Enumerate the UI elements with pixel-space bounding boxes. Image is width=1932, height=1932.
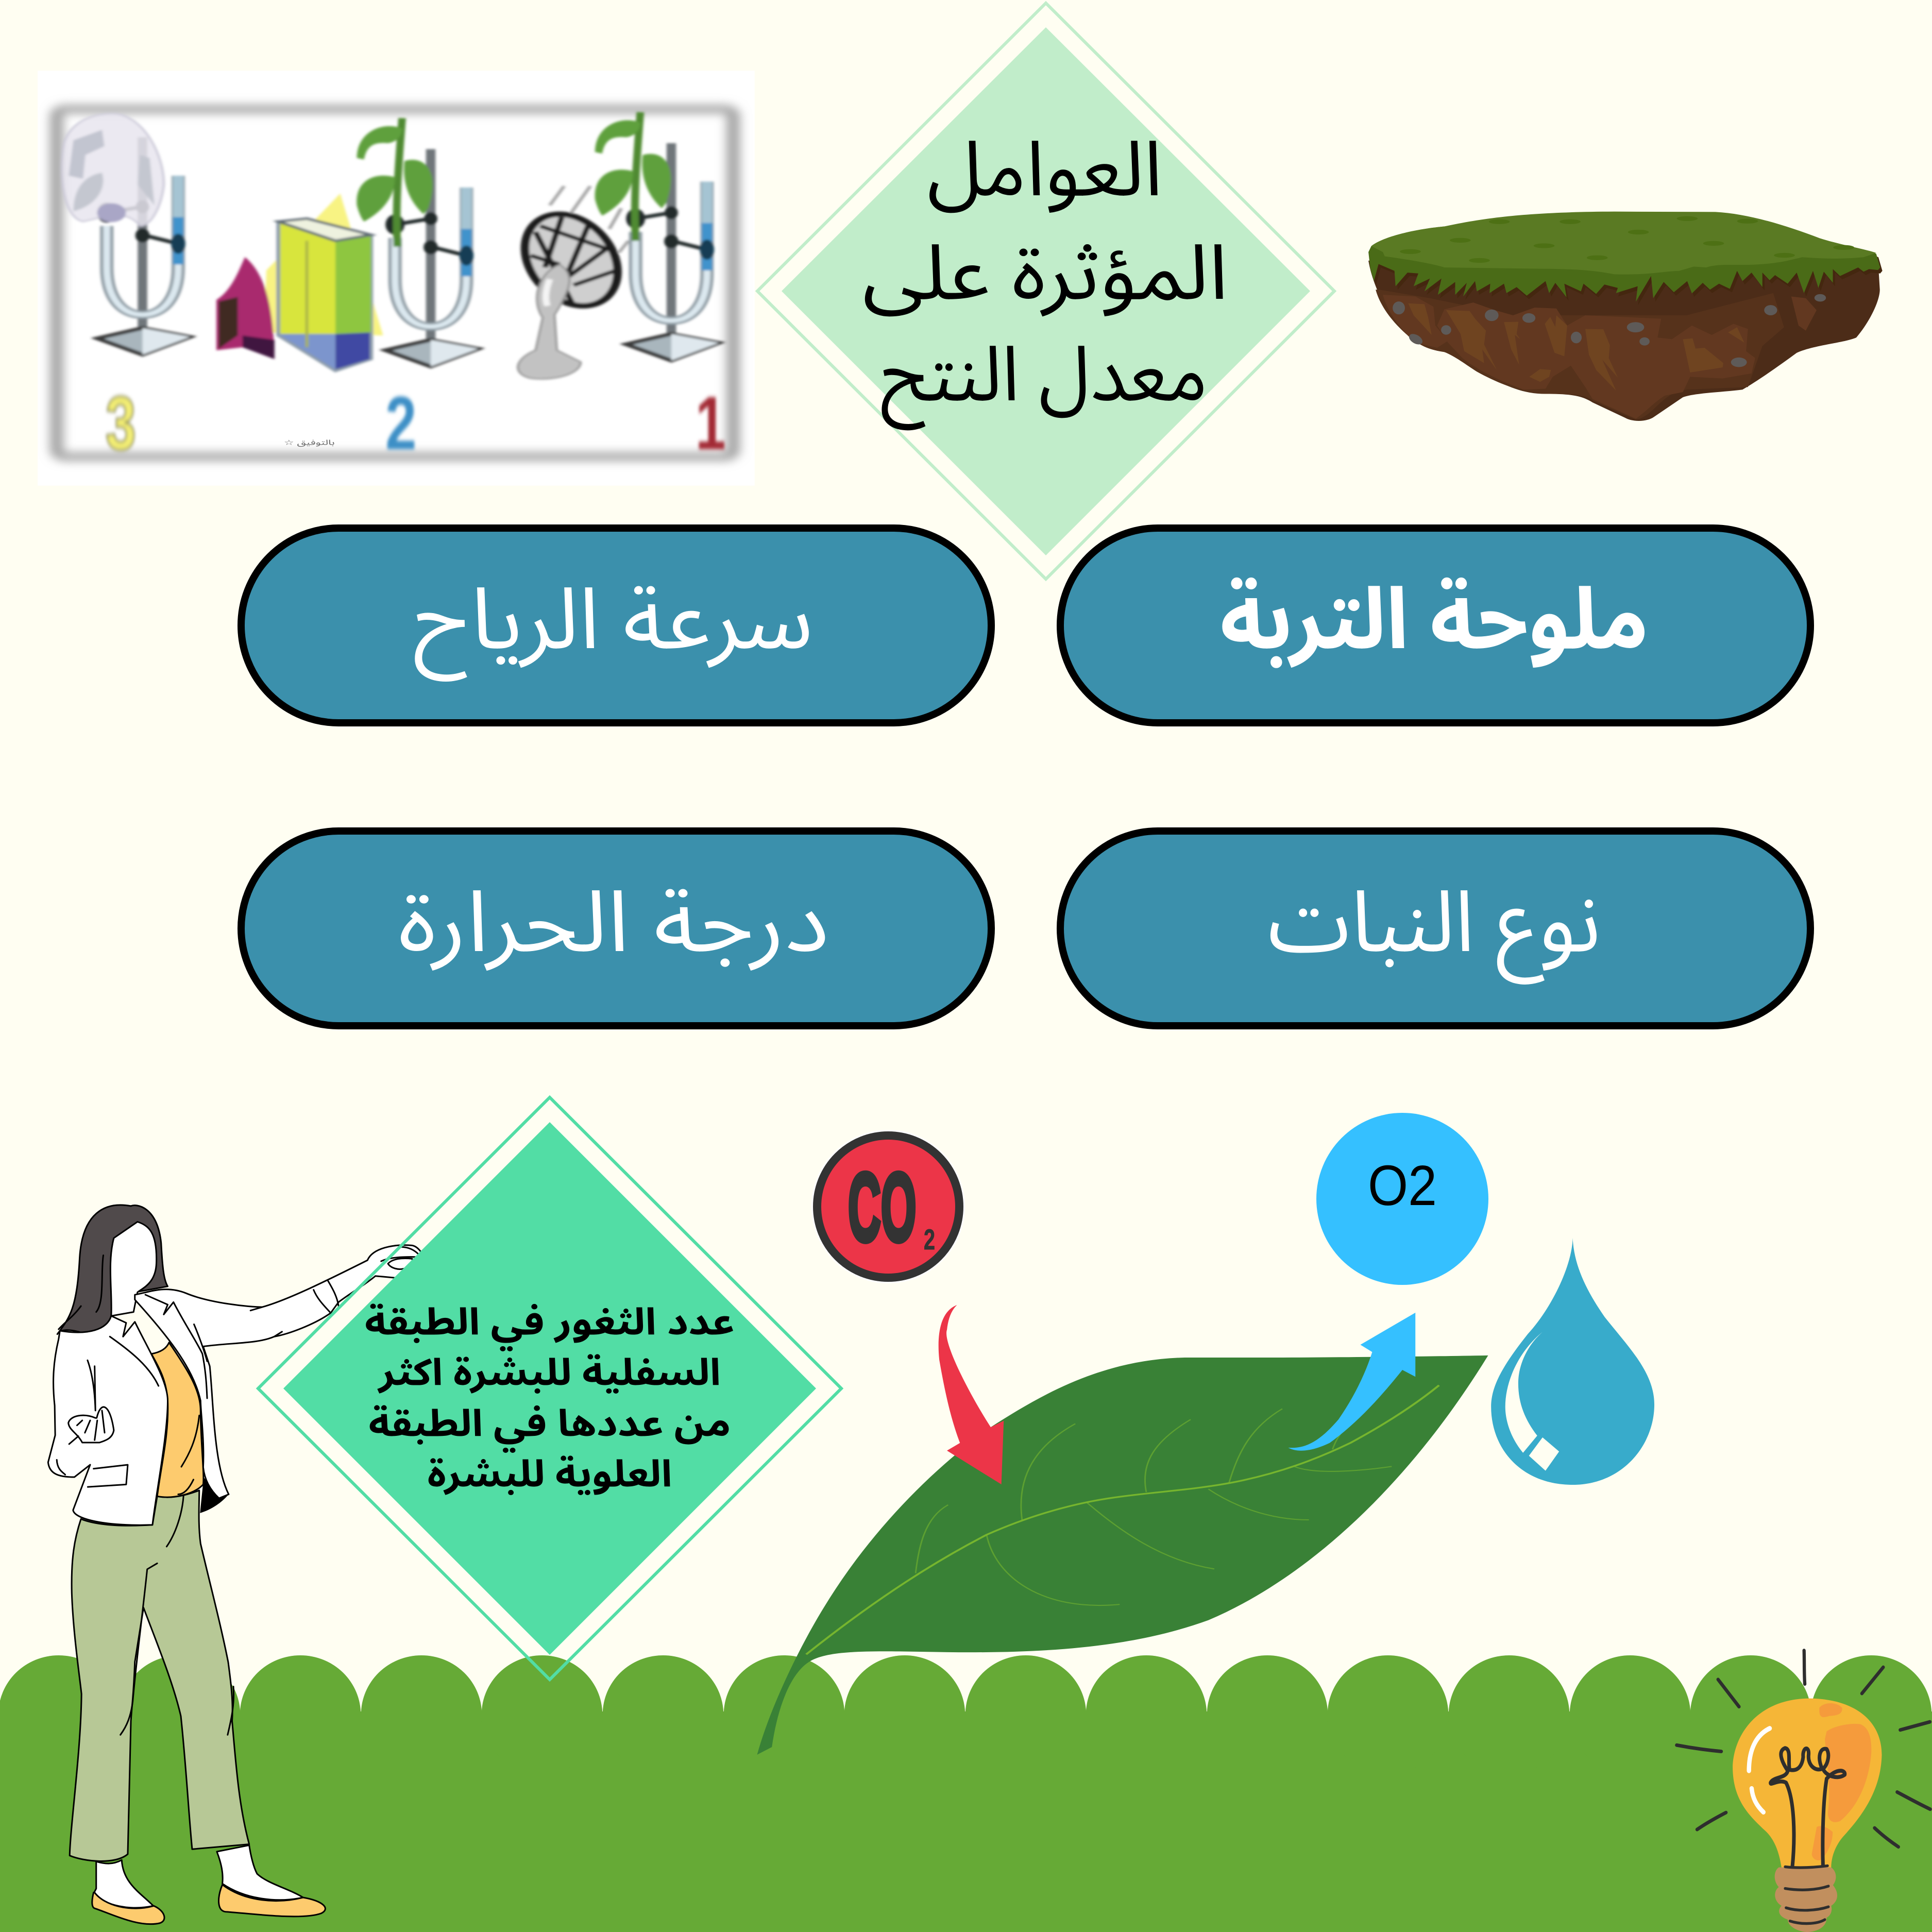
water drop xyxy=(1491,1238,1654,1485)
red CO2 arrow xyxy=(939,1305,1004,1484)
tube 2 with plant xyxy=(357,118,478,366)
factor pill: temperature xyxy=(241,831,991,1026)
glow rays xyxy=(1676,1651,1930,1847)
photo frame xyxy=(57,109,733,456)
bulb glass xyxy=(1733,1699,1882,1868)
factor pill: soil salinity xyxy=(1060,528,1810,723)
hair xyxy=(57,1205,168,1334)
factor pill: plant type: نوع النبات xyxy=(1268,834,1601,1014)
title diamond xyxy=(757,3,1334,579)
factor pill: temperature: درجة الحرارة xyxy=(398,834,829,1014)
jacket flap, raised sleeve and hand xyxy=(135,1245,431,1498)
O2 badge: O2 xyxy=(1368,1154,1437,1217)
factor pill: soil salinity: ملوحة التربة xyxy=(1220,531,1649,711)
title text: العوامل xyxy=(927,91,1162,252)
soil illustration xyxy=(1368,212,1883,421)
shirt xyxy=(151,1343,204,1497)
factor pill: wind speed xyxy=(241,528,991,723)
grass shadow xyxy=(1370,230,1883,305)
factor pill: plant type xyxy=(1060,831,1810,1026)
blue O2 arrow xyxy=(1288,1313,1415,1451)
title text: معدل النتح xyxy=(881,296,1208,457)
face xyxy=(110,1222,157,1316)
title text: المؤثرة على xyxy=(862,195,1228,355)
fan xyxy=(511,186,632,379)
photo numbers xyxy=(106,381,726,466)
tube 3 with plastic bag xyxy=(62,113,190,354)
stomata text: عدد الثغور في الطبقة xyxy=(365,1284,735,1362)
screw base xyxy=(1775,1868,1837,1932)
stomata text xyxy=(365,1284,735,1514)
photo: transpiration experiment xyxy=(38,71,755,486)
presenter woman xyxy=(48,1205,431,1924)
small caption: بالتوفيق ☆ xyxy=(284,435,335,450)
CO2 badge: CO xyxy=(848,1154,917,1262)
filament xyxy=(1771,1748,1845,1868)
CO2 badge xyxy=(811,1130,965,1283)
far hand fingers xyxy=(381,1247,428,1270)
leaf veins xyxy=(806,1385,1439,1654)
photo numbers: 2 xyxy=(385,381,417,466)
near hand xyxy=(69,1407,114,1443)
stones xyxy=(1393,294,1826,367)
title text xyxy=(862,91,1228,457)
tube 1 with plant xyxy=(595,112,719,361)
jacket lining xyxy=(200,1477,229,1513)
soil mid layer xyxy=(1376,290,1784,419)
photo numbers: 3 xyxy=(106,381,136,466)
grass blades xyxy=(1368,227,1880,301)
leaf xyxy=(757,1355,1488,1755)
left foot xyxy=(94,1860,153,1908)
stomata text: العلوية للبشرة xyxy=(428,1436,672,1514)
photo numbers: 1 xyxy=(696,381,726,466)
CO2 badge: 2 xyxy=(924,1223,935,1256)
soil base xyxy=(1368,261,1880,421)
pants xyxy=(70,1490,249,1861)
right foot xyxy=(217,1845,303,1900)
factor pill: wind speed: سرعة الرياح xyxy=(414,531,813,711)
lamp and water tank xyxy=(216,194,383,371)
grass top xyxy=(1371,212,1876,275)
stomata diamond xyxy=(258,1097,841,1680)
O2 badge xyxy=(1316,1113,1488,1285)
green scalloped hill xyxy=(0,1655,1932,1932)
light bulb xyxy=(1676,1651,1930,1932)
stomata text: السفلية للبشرة اكثر xyxy=(377,1334,721,1413)
stomata text: من عددها في الطبقة xyxy=(369,1385,731,1464)
clothing details xyxy=(59,1256,338,1735)
jacket body xyxy=(48,1316,168,1525)
